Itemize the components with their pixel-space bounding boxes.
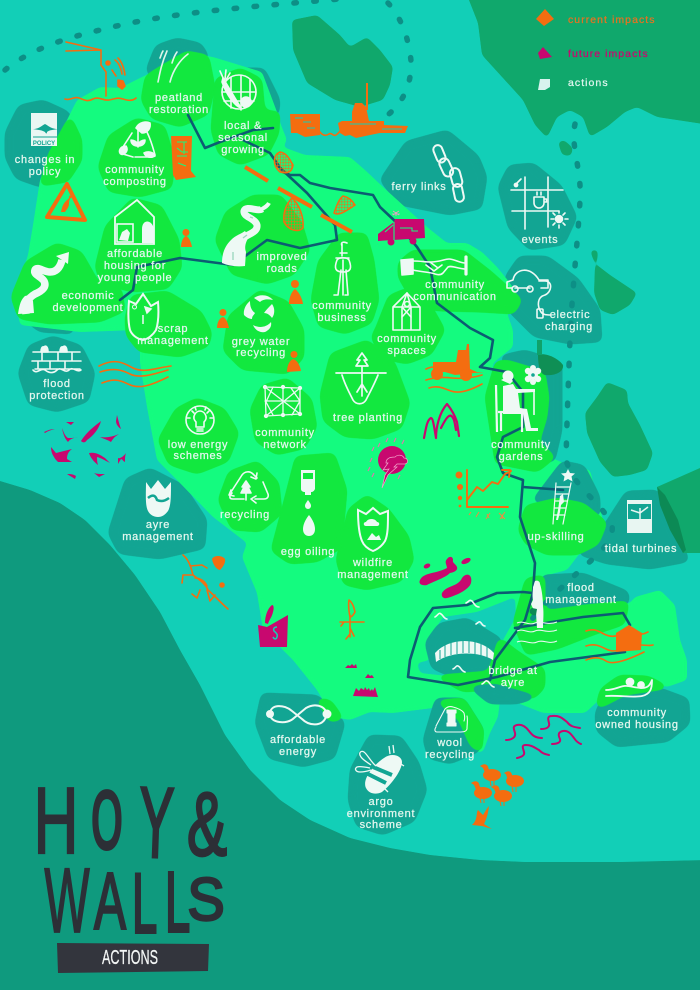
impact: tractor — [426, 344, 484, 392]
label: scrap management: management — [137, 335, 209, 347]
icon: street map — [511, 177, 568, 229]
panel: community owned housing — [595, 677, 688, 745]
label: bridge at ayre: bridge at — [488, 665, 538, 677]
label: grey water recycling — [232, 336, 290, 359]
island: east large — [585, 382, 653, 477]
icon: lightbulb in circle — [186, 406, 214, 434]
panel: flood management — [515, 575, 627, 653]
label: community gardens — [491, 439, 551, 463]
label: economic development: development — [53, 302, 123, 314]
label: wool recycling — [425, 737, 475, 761]
icon: winding growth arrow — [18, 252, 69, 314]
label: community business: business — [317, 312, 367, 324]
label: community gardens: gardens — [499, 451, 543, 463]
panel: community spaces — [373, 290, 443, 362]
impact: storm — [368, 438, 408, 488]
icon: bee — [356, 745, 404, 794]
panel: wildfire management — [337, 497, 412, 588]
icon: recycling arrows with tree — [229, 472, 268, 503]
ferry route: east — [528, 124, 612, 625]
panel: changes in policy — [7, 102, 80, 185]
panel: recycling — [220, 463, 280, 530]
impact: camper van — [378, 211, 425, 246]
label: affordable housing for young people — [98, 248, 172, 284]
lagoon: Ayre sea water — [417, 597, 516, 677]
icon: oil bottle and egg — [301, 470, 315, 536]
label: wildfire management: wildfire — [352, 557, 393, 569]
label: ayre management: ayre — [146, 519, 170, 531]
icon: ladder with star — [553, 469, 575, 524]
label: community composting: community — [105, 164, 165, 176]
land: Hoy main island — [15, 53, 687, 752]
label: argo environment scheme: argo — [369, 796, 393, 808]
banner: actions — [57, 943, 209, 973]
icon: wave mark — [148, 496, 169, 501]
icon: figure with pound sign — [334, 242, 351, 295]
label: community spaces: spaces — [387, 345, 427, 357]
icon: handshake — [401, 257, 466, 275]
label: wildfire management — [337, 557, 409, 581]
label: events: events — [522, 234, 558, 246]
title line: HOY& — [34, 766, 227, 879]
icon: shield — [128, 294, 158, 340]
icon: tidal turbine card — [627, 500, 652, 533]
title line: WALLS: L — [132, 853, 158, 953]
label: low energy schemes: schemes — [173, 450, 223, 462]
icon: thread spool with arrows — [435, 707, 467, 732]
label: local and seasonal growing: local & — [224, 120, 262, 132]
panel: ferry links — [382, 132, 485, 213]
panel: community gardens — [487, 352, 560, 470]
label: up-skilling: up-skilling — [528, 531, 584, 543]
ferry route: north west — [5, 0, 350, 70]
title: Hoy & Walls — [34, 766, 227, 953]
legend — [536, 9, 656, 90]
panel: peatland restoration — [143, 40, 213, 125]
label: wildfire management: management — [337, 569, 409, 581]
label: bridge at ayre — [488, 665, 538, 689]
label: tidal turbines: tidal turbines — [605, 543, 677, 555]
icon: brick wall — [32, 346, 81, 373]
label: grey water recycling: recycling — [236, 347, 286, 359]
label: community owned housing: community — [607, 707, 667, 719]
label: community gardens: community — [491, 439, 551, 451]
label: ayre management — [122, 519, 194, 543]
icon: basket of vegetables — [220, 70, 256, 110]
impact: bucket and bird — [258, 605, 288, 647]
impact: pink waves — [506, 716, 581, 758]
impact: fishing nets — [274, 152, 355, 230]
panel: tidal turbines — [580, 492, 687, 567]
panel: community communication — [400, 252, 520, 312]
chart: rising impact line — [456, 470, 511, 519]
title line: WALLS: A — [94, 857, 126, 947]
label: economic development: economic — [62, 290, 114, 302]
impact: power station and pollution — [65, 42, 136, 101]
panel: grey water recycling — [225, 292, 302, 372]
label: flood management — [545, 582, 617, 606]
icon: tree and root bowl — [336, 353, 386, 404]
icon: greenhouse — [393, 293, 420, 330]
label: scrap management: scrap — [158, 323, 188, 335]
label: flood management: management — [545, 594, 617, 606]
icon: house — [115, 200, 154, 244]
icon: infinity loop — [267, 705, 330, 724]
impact: pink grass tuft — [424, 404, 459, 438]
impact: pink oil slicks — [419, 557, 472, 598]
icon: arched bridge — [435, 641, 494, 662]
title line: WALLS: W — [44, 849, 90, 952]
panel: community business — [312, 235, 377, 332]
panel: affordable energy — [257, 695, 343, 765]
label: wool recycling: recycling — [425, 749, 475, 761]
panel: egg oiling — [273, 455, 345, 562]
impact: orange scroll map — [171, 136, 196, 180]
blobs over the land — [13, 53, 665, 762]
label: peatland restoration: peatland — [155, 92, 203, 104]
icon: houses on hand — [606, 678, 652, 697]
island: small islet — [558, 140, 573, 156]
island: east small — [590, 250, 637, 315]
label: changes in policy — [15, 154, 75, 178]
impact: orange people — [181, 229, 303, 372]
title line: HOY&: & — [187, 775, 227, 875]
impact: wildfire flames — [345, 664, 378, 697]
label: argo environment scheme: environment — [347, 808, 415, 820]
label: electric charging: electric — [550, 309, 590, 321]
label: economic development — [53, 290, 123, 314]
impact: geese — [472, 765, 524, 829]
label: changes in policy: policy — [29, 166, 61, 178]
title line: WALLS — [44, 849, 225, 953]
title line: HOY&: H — [34, 768, 78, 873]
icon: wave shield — [146, 480, 171, 517]
label: improved roads: roads — [266, 263, 298, 275]
label: flood protection: flood — [43, 378, 71, 390]
label: argo environment scheme — [347, 796, 415, 831]
label: electric charging: charging — [545, 321, 593, 333]
label: community composting — [103, 164, 167, 188]
label: affordable housing for young people: young people — [98, 272, 172, 284]
legend: future impacts: future impacts — [568, 48, 649, 60]
panel: low energy schemes — [160, 400, 237, 472]
label: affordable housing for young people: housing for — [104, 260, 166, 272]
ferry route: north — [385, 3, 411, 117]
label: affordable energy: affordable — [270, 734, 326, 746]
label: community communication — [413, 279, 497, 303]
label: community composting: composting — [103, 176, 167, 188]
impact: seabird flock — [44, 415, 126, 479]
label: grey water recycling: grey water — [232, 336, 290, 348]
landmass: northern mainland top right — [465, 0, 700, 138]
panel: events — [500, 165, 575, 248]
label: community communication: community — [425, 279, 485, 291]
legend: actions: actions — [568, 77, 609, 89]
label: community spaces — [377, 333, 437, 357]
label: peatland restoration — [149, 92, 209, 116]
panel: up-skilling — [520, 463, 605, 553]
title line: HOY&: Y — [137, 766, 175, 879]
label: local and seasonal growing: seasonal — [218, 132, 268, 144]
icon: grass strokes — [158, 51, 188, 82]
island: top centre — [292, 15, 393, 107]
icon: bridge slats — [440, 640, 487, 659]
label: flood protection — [29, 378, 85, 402]
title line: HOY&: O — [91, 772, 123, 869]
panel: economic development — [13, 245, 123, 332]
label: scrap management — [137, 323, 209, 347]
label: egg oiling: egg oiling — [281, 546, 335, 558]
banner: actions: ACTIONS — [102, 946, 158, 969]
label: community owned housing: owned housing — [595, 719, 679, 731]
label: community business: community — [312, 300, 372, 312]
panel: community network — [252, 380, 315, 453]
panel: electric charging — [507, 258, 600, 342]
icon: small wave marks — [435, 600, 494, 687]
label: local and seasonal growing: growing — [221, 144, 265, 156]
icon: person at table with flower — [496, 365, 541, 432]
label: community spaces: community — [377, 333, 437, 345]
label: community network: community — [255, 427, 315, 439]
label: community owned housing — [595, 707, 679, 731]
panel: improved roads — [217, 197, 308, 282]
road network — [120, 115, 630, 685]
panel: ayre management — [110, 470, 205, 557]
title line: WALLS: L — [165, 851, 191, 952]
label: argo environment scheme: scheme — [360, 819, 402, 831]
impact: warning triangle — [47, 184, 85, 220]
panel: scrap management — [127, 293, 210, 355]
icon: winding road — [222, 203, 269, 266]
icon: circular arrows — [244, 295, 274, 332]
label: bridge at ayre: ayre — [501, 677, 525, 689]
label: improved roads — [256, 251, 308, 275]
impact: orange road dashes — [245, 167, 352, 232]
impact: shed and ferry ship — [290, 83, 408, 138]
label: affordable housing for young people: affordable — [107, 248, 163, 260]
label: improved roads: improved — [256, 251, 308, 263]
label: affordable energy: energy — [279, 746, 317, 758]
label: ayre management: management — [122, 531, 194, 543]
label: changes in policy: changes in — [15, 154, 75, 166]
label: wool recycling: wool — [436, 737, 463, 749]
label: tree planting: tree planting — [333, 412, 403, 424]
label: electric charging — [545, 309, 593, 333]
label: community communication: communication — [413, 291, 497, 303]
label: flood management: flood — [567, 582, 595, 594]
panel: bridge at ayre — [427, 600, 543, 702]
label: affordable energy — [270, 734, 326, 758]
panel: flood protection — [20, 338, 93, 410]
panel: wool recycling — [425, 700, 482, 762]
panel: tree planting — [322, 342, 408, 437]
label: ferry links: ferry links — [392, 181, 446, 193]
label: peatland restoration: restoration — [149, 104, 209, 116]
icon: wildfire shield — [358, 508, 388, 551]
impact: flooded house — [586, 625, 653, 663]
impact: flood waves — [99, 362, 171, 387]
label: recycling: recycling — [220, 509, 270, 521]
icon: chain links — [432, 144, 465, 203]
icon: electric car — [507, 270, 551, 318]
label: flood protection: protection — [29, 390, 85, 402]
panel: argo environment scheme — [347, 737, 425, 833]
icon: network web — [264, 386, 302, 418]
sea blobs behind the land — [7, 40, 700, 833]
legend: current impacts: current impacts — [568, 14, 656, 26]
panel: affordable housing for young people — [97, 200, 180, 290]
label: community network: network — [263, 439, 307, 451]
panel: community composting — [100, 120, 173, 195]
panel: local and seasonal growing — [213, 70, 278, 163]
impact: sprouting plant — [340, 600, 364, 639]
icon: recycling leaves — [120, 122, 155, 157]
icon: figure wading — [517, 581, 557, 643]
label: community business — [312, 300, 372, 324]
icon: policy book: POLICY — [33, 141, 55, 147]
impact: shellfish and seaweed — [182, 555, 228, 609]
label: low energy schemes — [168, 439, 228, 462]
label: local and seasonal growing — [218, 120, 268, 156]
title line: WALLS: S — [187, 866, 225, 933]
label: community network — [255, 427, 315, 451]
foreground land: south mainland — [0, 478, 700, 990]
label: low energy schemes: low energy — [168, 439, 228, 451]
